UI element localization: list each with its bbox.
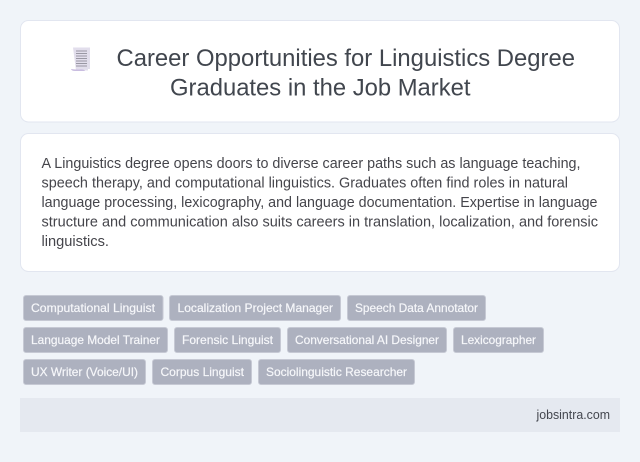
tag: UX Writer (Voice/UI): UX Writer (Voice/UI) — [31, 365, 138, 379]
tag: Conversational AI Designer: Conversational AI Designer — [295, 333, 439, 347]
text block: description: language processing, lexicography, and language documentation. Expertise in language — [42, 195, 598, 211]
tag: Corpus Linguist: Corpus Linguist — [160, 365, 245, 379]
tag: Forensic Linguist — [174, 328, 280, 352]
text block: description: linguistics. — [42, 234, 109, 250]
tag: Sociolinguistic Researcher — [258, 360, 414, 384]
tag: Speech Data Annotator: Speech Data Annotator — [355, 301, 478, 315]
tags: career roles — [24, 296, 544, 384]
tag: Lexicographer — [454, 328, 544, 352]
text block: description: A Linguistics degree opens doors to diverse career paths such as language teaching, — [42, 156, 580, 172]
tag: Speech Data Annotator — [348, 296, 486, 320]
tag: Language Model Trainer — [24, 328, 168, 352]
tag: Conversational AI Designer — [288, 328, 446, 352]
icon: document scroll — [71, 48, 90, 71]
text block: description — [42, 156, 598, 250]
tag: Computational Linguist: Computational Linguist — [31, 301, 156, 315]
tag: Localization Project Manager — [170, 296, 340, 320]
tag: Language Model Trainer: Language Model Trainer — [31, 333, 160, 347]
tag: Computational Linguist — [24, 296, 163, 320]
panel: description card — [20, 134, 620, 272]
panel: title card — [20, 20, 620, 122]
tag: UX Writer (Voice/UI) — [24, 360, 146, 384]
title: Career Opportunities for Linguistics Degree — [116, 45, 575, 72]
text block: description: structure and communication also suits careers in translation, localization, and forensic — [42, 214, 598, 230]
tag: Corpus Linguist — [152, 360, 252, 384]
tag: Sociolinguistic Researcher: Sociolinguistic Researcher — [266, 365, 407, 379]
text block: description: speech therapy, and computational linguistics. Graduates often find roles in natural — [42, 176, 568, 192]
tag: Lexicographer: Lexicographer — [461, 333, 536, 347]
footer bar — [20, 398, 620, 432]
tag: Localization Project Manager: Localization Project Manager — [178, 301, 333, 315]
tag: Forensic Linguist: Forensic Linguist — [182, 333, 274, 347]
title: Graduates in the Job Market — [170, 74, 471, 102]
footer source text: jobsintra.com — [536, 408, 610, 422]
title — [116, 45, 575, 102]
